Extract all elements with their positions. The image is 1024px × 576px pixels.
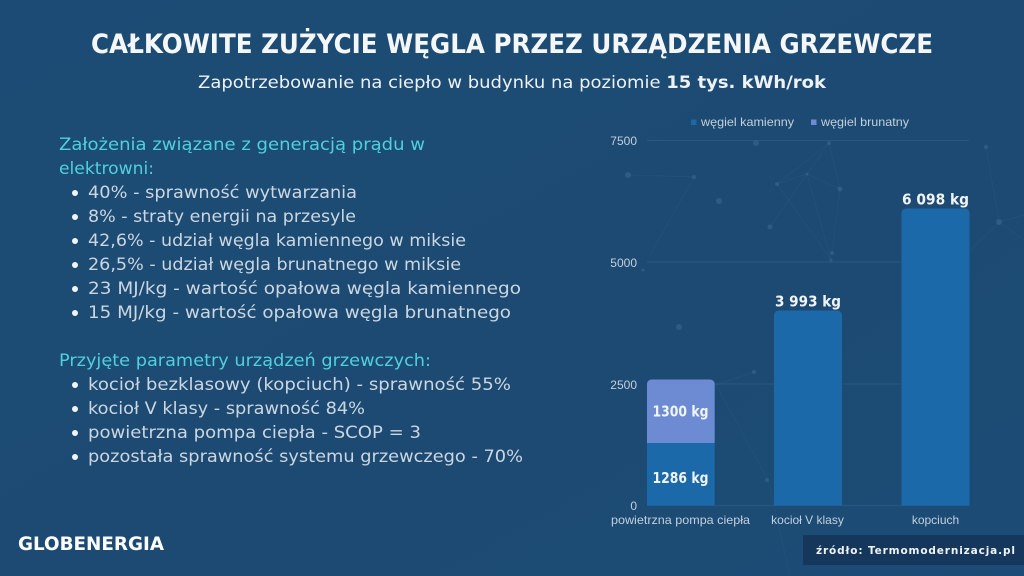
list: power generation assumptions: 26,5% - udział węgla brunatnego w miksie [88, 255, 461, 275]
bar: smoker boiler [902, 190, 970, 506]
list: heating device parameters: kocioł bezklasowy (kopciuch) - sprawność 55% [88, 375, 511, 395]
bar: air heat pump: 1286 kg [652, 469, 708, 487]
y axis labels: 5000 [610, 256, 637, 270]
legend: węgiel kamienny [700, 115, 794, 129]
source box: źródło: Termomodernizacja.pl [816, 545, 1015, 557]
y axis labels: 7500 [610, 134, 637, 148]
list: heating device parameters: kocioł V klasy - sprawność 84% [88, 399, 365, 419]
bar: air heat pump: 1300 kg [652, 402, 708, 420]
title: CAŁKOWITE ZUŻYCIE WĘGLA PRZEZ URZĄDZENIA GRZEWCZE [91, 28, 933, 60]
panel: power generation assumptions [59, 135, 521, 323]
bar: class V boiler: 3 993 kg [775, 292, 841, 310]
legend [691, 115, 909, 129]
logo: Globenergia: GLOBENERGIA [18, 533, 164, 555]
list: power generation assumptions: 15 MJ/kg - wartość opałowa węgla brunatnego [88, 303, 511, 323]
bar chart: coal use per device [610, 115, 970, 527]
x axis labels: kopciuch [912, 513, 959, 527]
bar: class V boiler [774, 292, 842, 506]
list: power generation assumptions: 40% - sprawność wytwarzania [88, 183, 357, 203]
list: heating device parameters [72, 375, 523, 467]
list: power generation assumptions: 8% - straty energii na przesyle [88, 207, 356, 227]
y axis labels: 2500 [610, 378, 637, 392]
list: power generation assumptions: 23 MJ/kg - wartość opałowa węgla kamiennego [88, 279, 521, 299]
x axis labels: powietrzna pompa ciepła [611, 513, 750, 527]
heading: power generation assumptions: elektrowni: [59, 159, 154, 179]
panel: heating device parameters [59, 351, 523, 467]
subtitle: Zapotrzebowanie na ciepło w budynku na poziomie 15 tys. kWh/rok [198, 73, 827, 93]
legend: węgiel brunatny [820, 115, 909, 129]
y axis labels: 0 [630, 499, 637, 513]
list: power generation assumptions: 42,6% - udział węgla kamiennego w miksie [88, 231, 466, 251]
heading: power generation assumptions: Założenia związane z generacją prądu w [59, 135, 425, 155]
list: heating device parameters: powietrzna pompa ciepła - SCOP = 3 [88, 423, 421, 443]
x axis labels [611, 513, 959, 527]
bar: air heat pump [647, 380, 715, 506]
heading: power generation assumptions [59, 135, 425, 179]
bar: smoker boiler: 6 098 kg [902, 190, 969, 208]
list: heating device parameters: pozostała sprawność systemu grzewczego - 70% [88, 447, 523, 467]
source box [803, 535, 1024, 565]
list: power generation assumptions [72, 183, 521, 323]
x axis labels: kocioł V klasy [771, 513, 844, 527]
heading: heating device parameters: Przyjęte parametry urządzeń grzewczych: [59, 351, 431, 371]
y axis labels [610, 134, 637, 513]
